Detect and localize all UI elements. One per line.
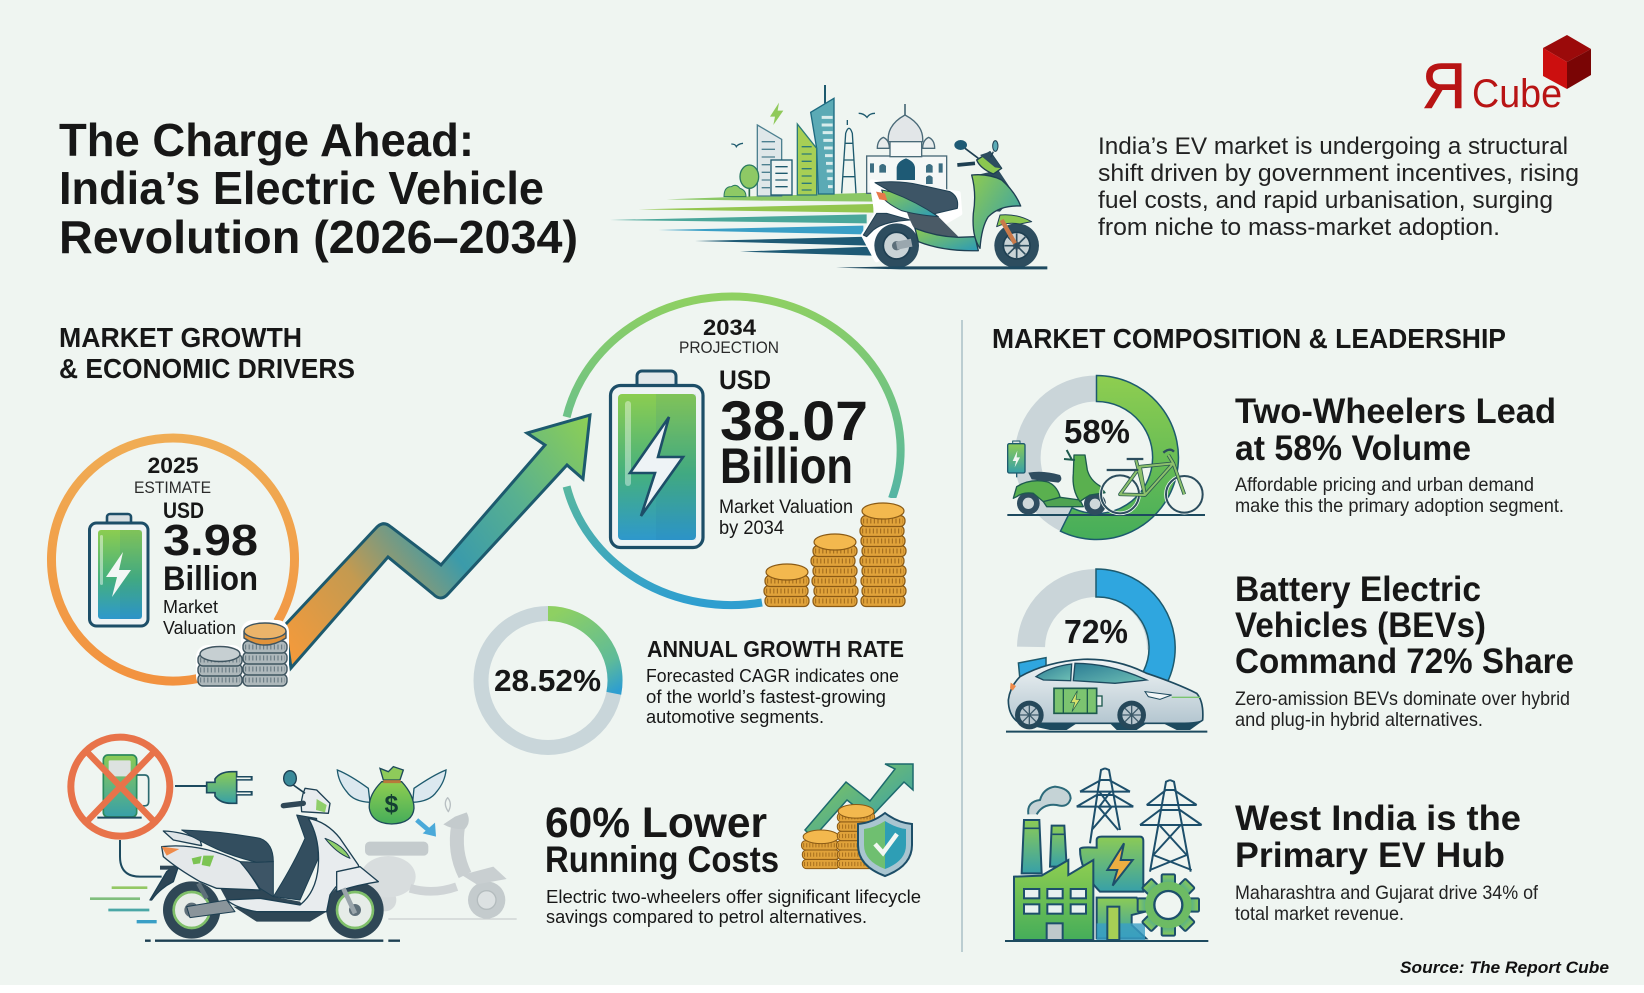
text block: 60% lower running costs: 60% Lower: [545, 799, 767, 847]
heading: market growth and economic drivers: [59, 322, 355, 384]
text block: 60% lower running costs: Electric two-wheelers offer significant lifecycle: [546, 886, 921, 907]
title: Revolution (2026–2034): [59, 211, 578, 263]
icon: taj mahal: [867, 104, 947, 193]
text block: two-wheelers: Two-Wheelers Lead: [1235, 392, 1556, 431]
icon: growth arrow, coins and shield: [801, 764, 913, 876]
chart: 58% donut: [1014, 375, 1178, 540]
icon: ghost petrol scooter: [361, 798, 517, 919]
ring: green to blue arc: [567, 297, 901, 605]
text block: annual growth rate: [646, 636, 904, 727]
chart: 58% donut: 58%: [1064, 413, 1130, 450]
icon: plug and cable: [120, 772, 253, 877]
chart: annual growth rate donut: [481, 614, 615, 748]
text block: two-wheelers: [1235, 392, 1564, 517]
chart: 2025 estimate ring: 3.98: [163, 516, 258, 565]
text block: west india: West India is the: [1235, 799, 1521, 838]
logo: RCube: Я: [1422, 50, 1466, 122]
text block: introduction: fuel costs, and rapid urbanisation, surging: [1098, 187, 1553, 214]
illustration: electric scooter replacing petrol: [71, 737, 517, 941]
text block: annual growth rate: Forecasted CAGR indicates one: [646, 665, 899, 686]
chart: 2034 projection ring: 38.07: [720, 389, 868, 452]
logo: RCube: Cube: [1472, 72, 1562, 116]
icon: speed lines: [610, 193, 877, 256]
panel: battery electric vehicles: [1006, 569, 1574, 732]
chart: 72% donut: [1018, 569, 1175, 714]
text block: bevs: [1235, 570, 1574, 731]
heading: market composition and leadership: MARKET COMPOSITION & LEADERSHIP: [992, 323, 1506, 354]
text block: 60% lower running costs: Running Costs: [545, 839, 779, 880]
text block: 60% lower running costs: savings compared to petrol alternatives.: [546, 906, 867, 927]
text block: bevs: Battery Electric: [1235, 570, 1481, 609]
icon: factory, pylons and gear: [1005, 768, 1208, 941]
text block: west india: Primary EV Hub: [1235, 836, 1505, 875]
source note: Source: The Report Cube: [1400, 958, 1609, 977]
text block: two-wheelers: make this the primary adoption segment.: [1235, 495, 1564, 517]
icon: silver coins: [196, 620, 289, 688]
icon: money bag with wings: [337, 767, 446, 837]
text block: west india: [1235, 799, 1539, 925]
icon: battery small: [90, 514, 148, 626]
icon: gold coins: [762, 498, 908, 610]
text block: introduction: India’s EV market is undergoing a structural: [1098, 133, 1568, 160]
text block: introduction: [1098, 133, 1579, 241]
chart: 2025 estimate ring: Valuation: [163, 618, 236, 638]
text block: bevs: and plug-in hybrid alternatives.: [1235, 709, 1483, 731]
divider: [961, 320, 963, 952]
text block: annual growth rate: ANNUAL GROWTH RATE: [647, 636, 904, 662]
text block: west india: total market revenue.: [1235, 903, 1404, 925]
title: India’s Electric Vehicle: [59, 162, 544, 214]
icon: green scooter: [836, 140, 1047, 269]
text block: bevs: Command 72% Share: [1235, 642, 1574, 681]
chart: annual growth rate donut: 28.52%: [494, 663, 601, 698]
arrow: growth trend: [285, 415, 590, 668]
icon: no petrol sign: [71, 737, 170, 836]
text block: introduction: shift driven by government incentives, rising: [1098, 160, 1579, 187]
chart: 2034 projection ring: Market Valuation: [719, 497, 853, 518]
chart: 2034 projection ring: Billion: [720, 438, 853, 494]
icon: battery large: [610, 371, 703, 548]
chart: 2034 projection ring: [567, 297, 908, 610]
icon: scooter and bicycle: [1007, 441, 1205, 515]
chart: 2034 projection ring: by 2034: [719, 518, 784, 539]
logo: cube: [1543, 35, 1591, 89]
chart: 2025 estimate ring: ESTIMATE: [134, 478, 211, 497]
chart: 2034 projection ring: 2034: [703, 315, 757, 340]
text block: introduction: from niche to mass-market adoption.: [1098, 214, 1500, 241]
text block: bevs: Zero-amission BEVs dominate over hybrid: [1235, 688, 1570, 710]
icon: electric car: [1006, 659, 1207, 732]
chart: 2034 projection ring: PROJECTION: [679, 338, 779, 357]
heading: market growth and economic drivers: MARKET GROWTH: [59, 322, 302, 353]
chart: 2025 estimate ring: Market: [163, 597, 218, 617]
chart: 72% donut: 72%: [1064, 613, 1128, 650]
logo: RCube: [1422, 35, 1591, 122]
text block: west india: Maharashtra and Gujarat drive 34% of: [1235, 882, 1539, 904]
panel: two-wheelers: [1007, 375, 1564, 540]
text block: annual growth rate: automotive segments.: [646, 706, 824, 727]
text block: annual growth rate: of the world’s fastest-growing: [646, 686, 886, 707]
icon: white electric scooter: [90, 771, 400, 941]
chart: 2025 estimate ring: Billion: [163, 560, 258, 598]
title: The Charge Ahead:: [59, 114, 474, 166]
title: [59, 114, 578, 263]
text block: 60% lower running costs: [545, 799, 921, 927]
chart: 2025 estimate ring: [51, 438, 294, 681]
hero illustration: city skyline and electric scooter: [610, 85, 1047, 269]
chart: 2025 estimate ring: USD: [163, 498, 204, 523]
heading: market growth and economic drivers: & ECONOMIC DRIVERS: [59, 353, 355, 384]
text block: two-wheelers: Affordable pricing and urban demand: [1235, 474, 1534, 496]
text block: two-wheelers: at 58% Volume: [1235, 429, 1471, 468]
icon: city skyline: [724, 85, 875, 197]
icon: money bag with wings: $: [384, 791, 398, 818]
chart: 2034 projection ring: USD: [719, 365, 771, 395]
panel: west india: [1005, 768, 1539, 941]
text block: bevs: Vehicles (BEVs): [1235, 606, 1486, 645]
ring: orange arc: [51, 438, 294, 681]
chart: 2025 estimate ring: 2025: [148, 453, 198, 478]
